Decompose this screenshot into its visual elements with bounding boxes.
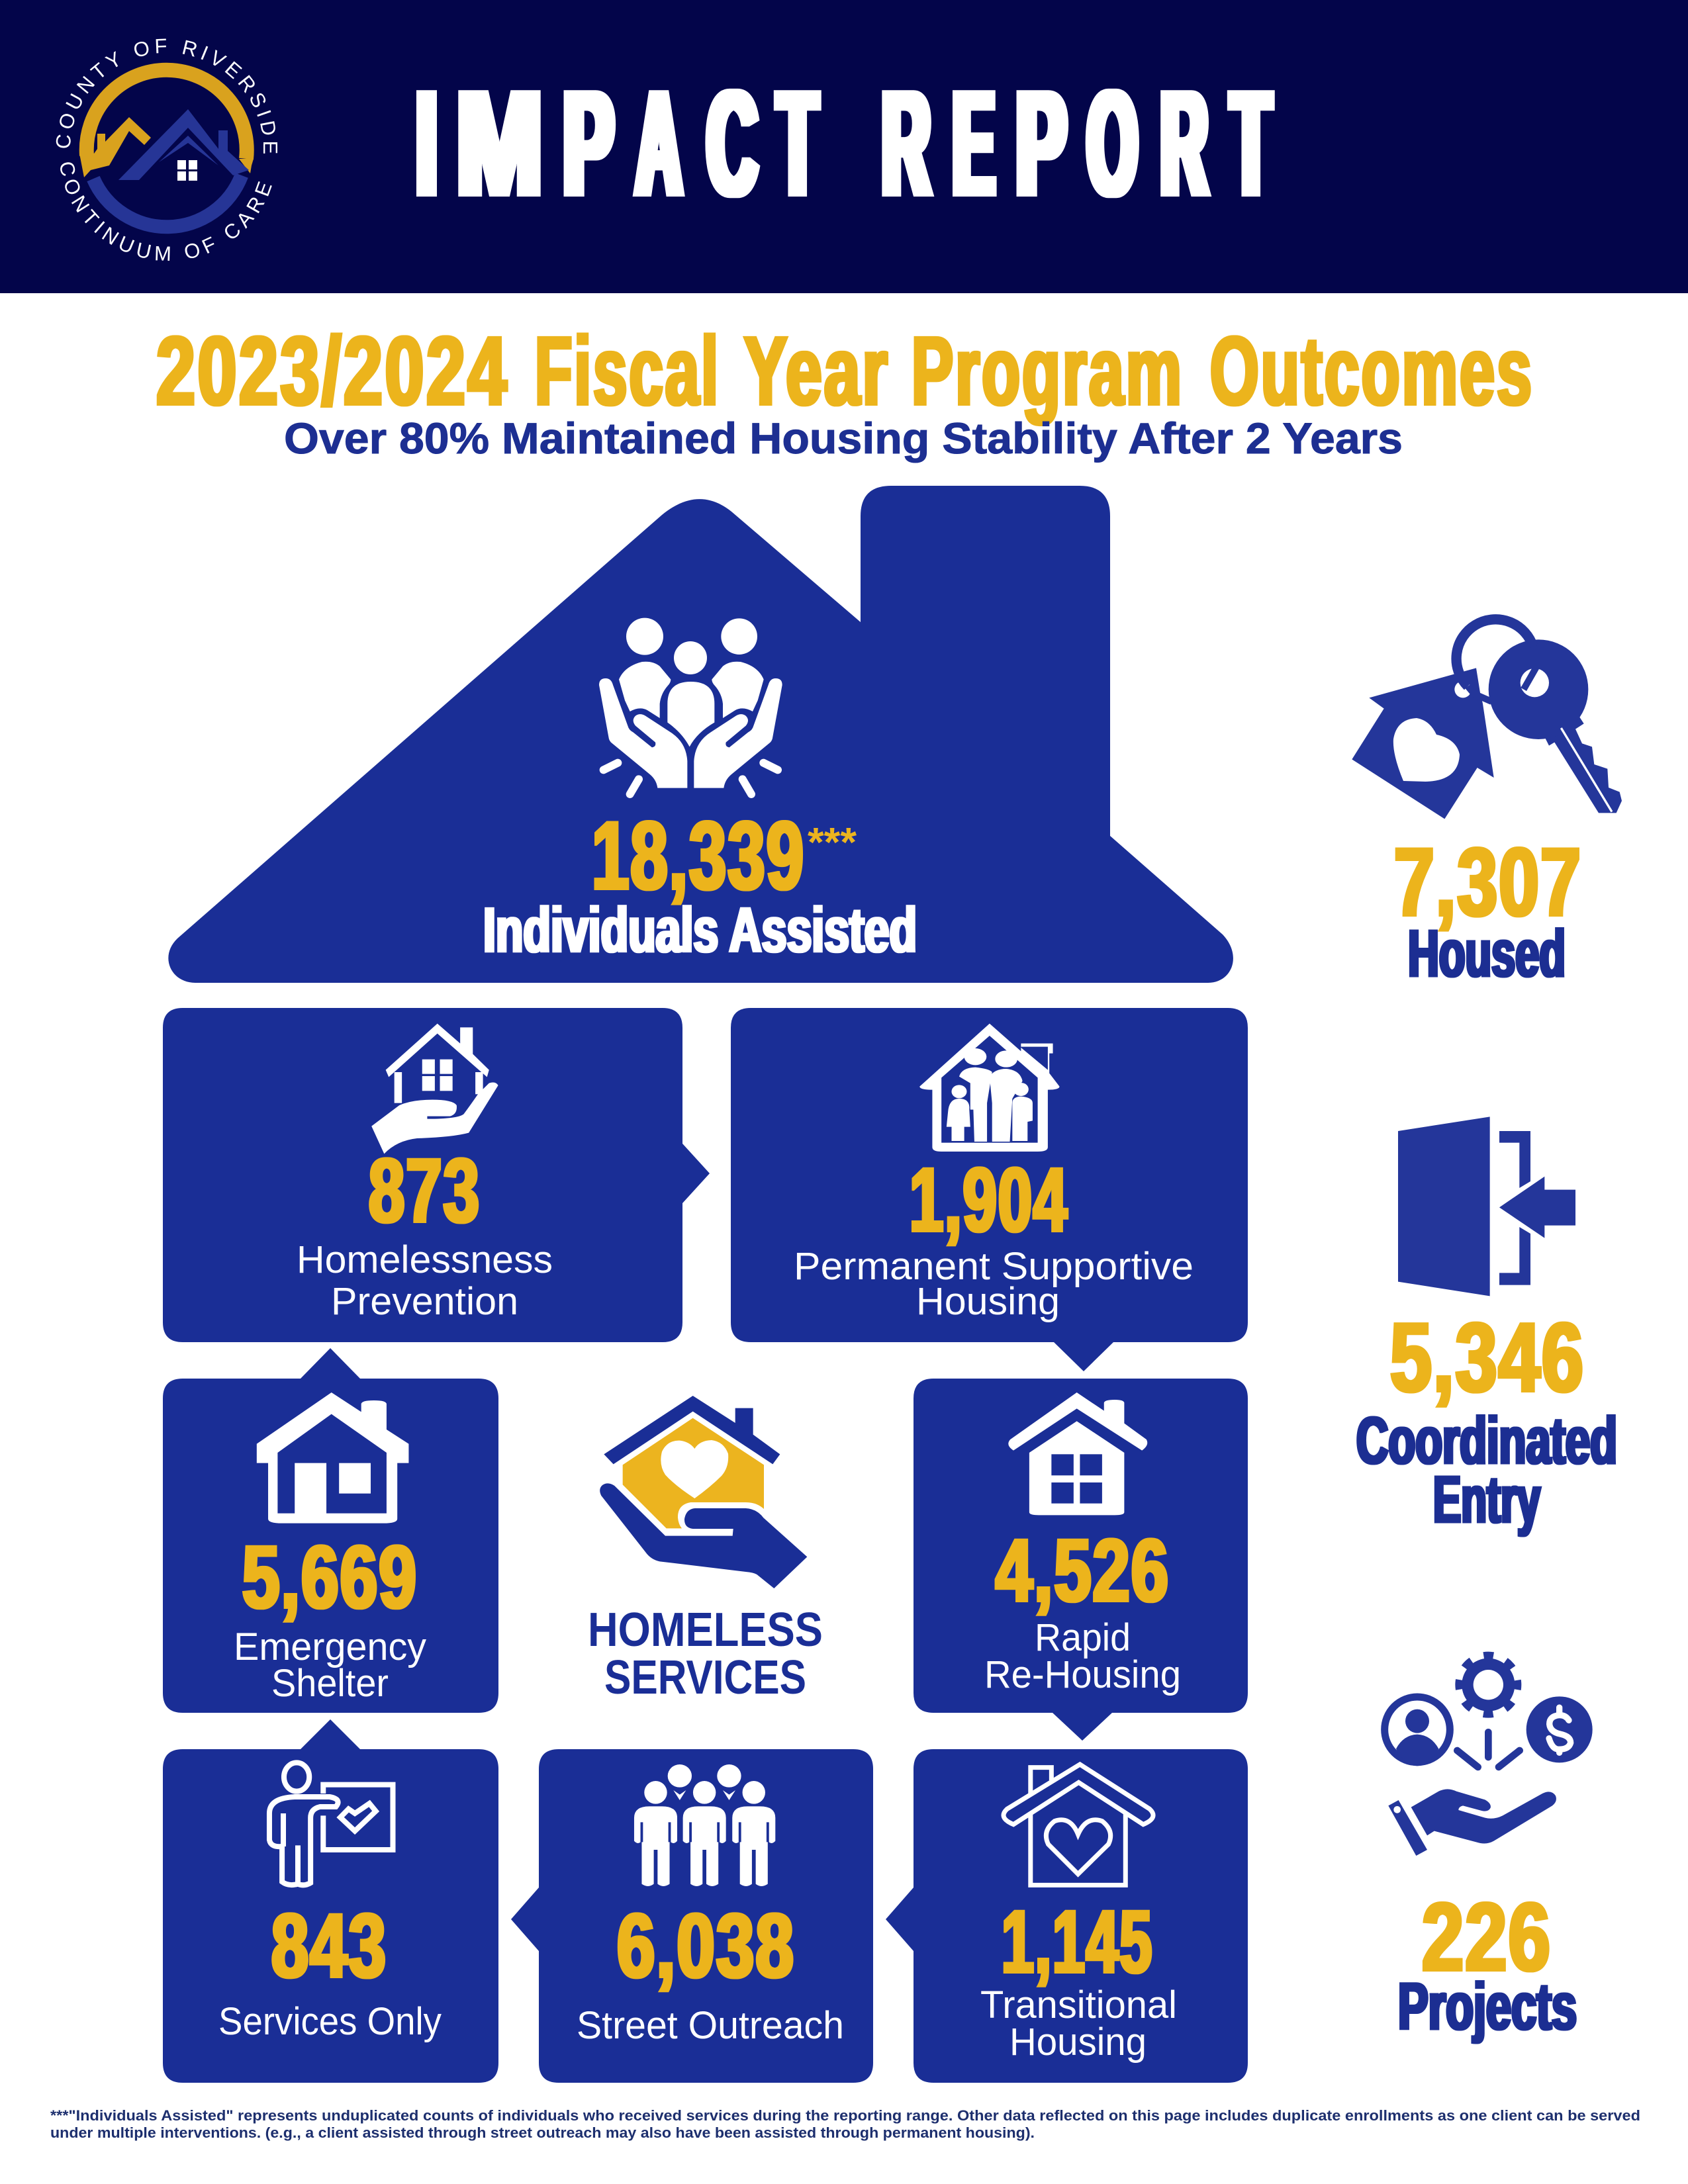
- label: homelessness prevention: Homelessness: [297, 1238, 553, 1281]
- icon: house with heart: [1004, 1764, 1153, 1885]
- footnote: ***"Individuals Assisted" represents unduplicated counts of individuals who received services during the reporting range. Other data reflected on this page includes duplicate enrollments as one client can be served: [50, 2107, 1640, 2124]
- title: R: [1161, 60, 1207, 226]
- label: permanent supportive housing: Permanent Supportive: [794, 1245, 1194, 1288]
- heading: fiscal year outcomes: 2023/2024: [156, 317, 509, 426]
- title: M: [457, 60, 542, 226]
- number: 1,904: 1,904: [910, 1150, 1068, 1251]
- title: I: [416, 60, 437, 226]
- title: P: [1017, 60, 1066, 226]
- icon: presenter with board: [269, 1762, 393, 1885]
- panel: transitional housing: [886, 1749, 1248, 2083]
- icon: house on hand: [371, 1024, 498, 1154]
- number: 6,038: 6,038: [617, 1895, 795, 1997]
- icon: house: [257, 1392, 408, 1524]
- number: 4,526: 4,526: [996, 1522, 1170, 1620]
- heading: fiscal year outcomes: Fiscal: [535, 317, 720, 426]
- icon: house keychain and key: [1352, 619, 1622, 819]
- title: R: [882, 60, 930, 226]
- number: 843: 843: [271, 1895, 387, 1997]
- number: 18,339: 18,339: [592, 801, 805, 909]
- number: 5,669: 5,669: [242, 1528, 418, 1627]
- stat: coordinated entry: [1356, 1116, 1617, 1537]
- title: P: [564, 60, 613, 226]
- panel: services only: [163, 1719, 498, 2083]
- label: coordinated entry: Entry: [1433, 1463, 1540, 1537]
- number: 873: 873: [369, 1140, 481, 1242]
- label: homelessness prevention: Prevention: [331, 1280, 518, 1323]
- icon: people in hands: [599, 618, 782, 794]
- panel: permanent supportive housing: [731, 1008, 1248, 1371]
- label: services only: Services Only: [218, 2000, 442, 2043]
- label: homeless services: HOMELESS: [588, 1604, 823, 1657]
- stat: projects: [1385, 1656, 1593, 2044]
- subheading: Over 80% Maintained Housing Stability After 2 Years: [284, 414, 1403, 463]
- icon: house with window: [1008, 1392, 1147, 1515]
- title: T: [778, 60, 817, 226]
- label: rapid re-housing: Re-Housing: [984, 1653, 1181, 1696]
- logo: County of Riverside Continuum of Care: [56, 38, 277, 261]
- label: emergency shelter: Emergency: [234, 1625, 426, 1668]
- panel: emergency shelter: [163, 1348, 498, 1713]
- label: individuals assisted: Individuals Assisted: [483, 895, 917, 966]
- panel: rapid re-housing: [914, 1379, 1248, 1741]
- number: 7,307: 7,307: [1394, 828, 1582, 936]
- icon: group of people: [634, 1764, 775, 1886]
- icon: homeless services hand and house: [600, 1396, 807, 1588]
- logo: County of Riverside Continuum of Care: CONTINUUM OF CARE: [60, 162, 272, 261]
- title: O: [1088, 60, 1137, 226]
- panel: roof individuals assisted: [168, 486, 1233, 983]
- panel: homelessness prevention: [163, 1008, 710, 1342]
- label: permanent supportive housing: Housing: [916, 1280, 1060, 1323]
- label: transitional housing: Housing: [1009, 2021, 1147, 2064]
- number: 5,346: 5,346: [1390, 1303, 1585, 1412]
- header band: T: [1231, 60, 1271, 226]
- label: transitional housing: Transitional: [980, 1983, 1177, 2026]
- icon: family in house: [919, 1024, 1060, 1152]
- label: projects: Projects: [1398, 1970, 1577, 2044]
- number: 1,145: 1,145: [1002, 1893, 1153, 1991]
- panel: street outreach: [511, 1749, 873, 2083]
- logo: County of Riverside Continuum of Care: COUNTY OF RIVERSIDE: [56, 38, 277, 154]
- label: emergency shelter: Shelter: [271, 1662, 389, 1705]
- footnote: under multiple interventions. (e.g., a client assisted through street outreach may also have been assisted through permanent housing).: [50, 2124, 1035, 2141]
- icon: door with arrow: [1398, 1116, 1575, 1296]
- title: C: [707, 60, 757, 226]
- header band: [0, 0, 1688, 293]
- label: street outreach: Street Outreach: [577, 2004, 844, 2047]
- stat: housed: [1352, 619, 1622, 991]
- label: housed: Housed: [1408, 917, 1566, 991]
- footnote asterisks: ***: [808, 820, 857, 866]
- title: A: [636, 60, 682, 226]
- heading: fiscal year outcomes: Year: [744, 317, 890, 426]
- label: rapid re-housing: Rapid: [1035, 1616, 1131, 1659]
- label: homeless services: SERVICES: [604, 1651, 806, 1704]
- number: 226: 226: [1422, 1883, 1552, 1991]
- icon: hand with gear, person and dollar: [1385, 1656, 1593, 1856]
- heading: fiscal year outcomes: Program: [912, 317, 1184, 426]
- title: E: [953, 60, 994, 226]
